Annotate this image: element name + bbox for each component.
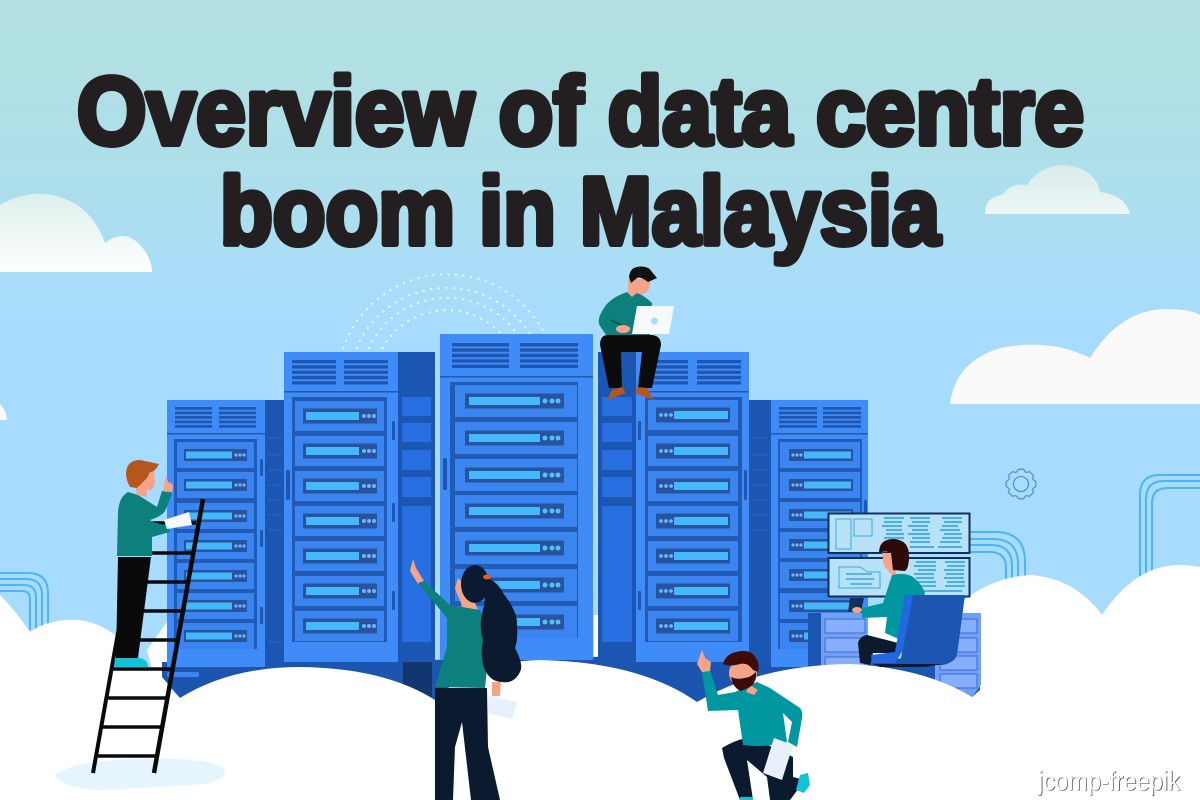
beard [731, 672, 756, 691]
server rack E [749, 400, 868, 667]
hair [723, 651, 759, 672]
hand [410, 559, 424, 584]
person: woman pointing [410, 559, 521, 800]
icon: gear [1006, 469, 1036, 499]
shoe [796, 773, 810, 793]
cloud: top left [0, 194, 152, 272]
person: operator at monitors [848, 539, 965, 667]
server base [162, 655, 980, 702]
hair [126, 460, 159, 488]
shoes [607, 387, 654, 400]
head [136, 470, 155, 497]
foreground cloud [0, 595, 1000, 800]
paper [164, 512, 192, 529]
paper [488, 695, 517, 719]
server rack C [440, 334, 593, 660]
server rack D [598, 352, 749, 662]
person: man sitting with laptop [599, 267, 674, 400]
laptop [632, 306, 674, 334]
dotted signal arcs [341, 274, 553, 355]
person: bearded man kneeling [697, 650, 810, 800]
pipes: middle [960, 532, 1025, 590]
trousers [435, 688, 500, 800]
sweater [702, 670, 802, 747]
neck and face [455, 578, 478, 610]
legs [600, 335, 661, 388]
ground shadow [55, 759, 225, 790]
background white cloud behind racks [147, 565, 1200, 800]
hair [461, 565, 521, 682]
hand with paper [492, 682, 501, 696]
pipes: right [1140, 475, 1200, 590]
pointing hand [163, 475, 173, 492]
ladder rails and rungs behind [93, 523, 196, 773]
sweater [418, 581, 490, 688]
title: boom in Malaysia [220, 158, 941, 265]
hair [879, 539, 909, 571]
face [882, 553, 896, 575]
photo credit: jcomp-freepik [1038, 767, 1181, 797]
cloud: top right [985, 165, 1130, 214]
hand [852, 607, 862, 613]
photo credit: jcomp-freepik [1037, 766, 1180, 796]
chair [871, 595, 965, 667]
server rack A [167, 400, 285, 667]
hand [697, 650, 711, 672]
hair [629, 267, 657, 283]
hair band [483, 574, 491, 580]
monitor: top [828, 514, 970, 553]
head [628, 279, 650, 300]
ladder right rail [154, 499, 203, 773]
filing cabinet: right [922, 613, 981, 697]
cloud: left edge sliver [0, 404, 7, 420]
head [746, 685, 758, 695]
keyboard [848, 598, 864, 612]
filing cabinet: left [808, 613, 868, 673]
legs [116, 557, 151, 658]
trousers [858, 635, 900, 665]
cloud: right middle [950, 309, 1200, 404]
title [77, 58, 1084, 265]
trousers [722, 738, 805, 800]
hand [616, 325, 630, 333]
server rack B [284, 352, 435, 662]
title: Overview of data centre [77, 58, 1084, 165]
monitor: bottom [828, 558, 970, 596]
paper [763, 738, 793, 780]
sweater [117, 491, 172, 556]
person: man on ladder [93, 460, 203, 773]
sweater [599, 292, 652, 335]
shoe [114, 658, 148, 667]
sweater [862, 574, 925, 643]
pipes: left [0, 573, 48, 630]
